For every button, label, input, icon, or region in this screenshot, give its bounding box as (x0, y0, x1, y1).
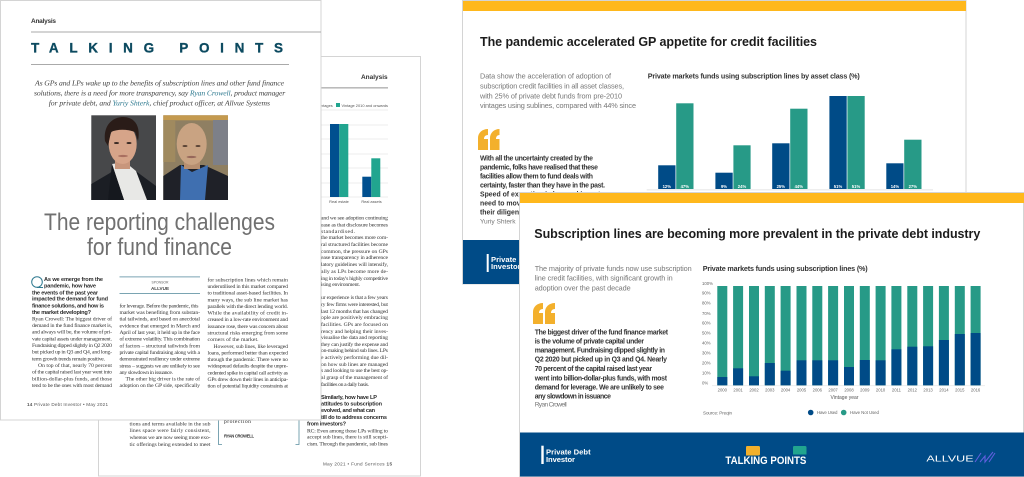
bar chart: vintage comparison: Real assets (361, 199, 382, 204)
text block: lower left column: tions and terms available in the sub (130, 421, 211, 427)
bar chart: subscription lines by asset class: 51% (852, 184, 860, 189)
text block: column one: tend to be the ones with most demand (32, 383, 112, 389)
text block: right column: ease as that disclosure becomes (321, 222, 389, 228)
footer band (520, 432, 1024, 476)
callout: sponsor box: SPONSOR (152, 280, 169, 284)
text block: standfirst (34, 78, 286, 108)
bar chart: vintage comparison: Real estate (329, 199, 349, 204)
text block: right column: ing in today's highly competitive (321, 276, 388, 282)
text block: column three: While the availability of credit in- (208, 310, 288, 317)
x axis labels: 2015 (955, 387, 965, 392)
text block: intro: Data show the acceleration of adoption of (480, 72, 612, 80)
text block: right column: ople are positively embracing (321, 315, 388, 321)
x axis labels: 2012 (908, 387, 918, 392)
text block: column three: parallels with the direct lending world. (208, 304, 289, 310)
text block: right column: last 12 months that has changed (321, 309, 388, 315)
x axis labels: 2009 (860, 387, 870, 392)
text block: pull quote: their diligence (480, 210, 527, 216)
text block: column one: finance solutions, and how is (32, 303, 104, 309)
text block: pull quote: certainty, faster than they have in the past. (480, 182, 605, 190)
text block: column two: adoption on the GP side, specifically (120, 382, 200, 389)
text block: column two: tial tailwinds, and based on anecdotal (120, 317, 200, 323)
x axis labels: 2001 (733, 387, 743, 392)
bar chart: subscription lines by asset class: 51% (834, 184, 842, 189)
bar chart: subscription lines by asset class: 27% (909, 184, 917, 189)
text block: right column: the market becomes more com- (321, 235, 388, 241)
text block: pull quote: is the volume of private capital under (535, 338, 644, 346)
text block: pull quote: need to move quickly and complete (480, 200, 597, 208)
callout: sponsor box (120, 276, 200, 294)
text block: column three: many ways, the sub line market has (208, 297, 289, 303)
text block: column one: and always will be, the volume of pri- (32, 329, 112, 336)
bar chart: subscription lines by asset class: 25% (777, 184, 785, 189)
text block: right column: rency and helping their inves- (321, 329, 388, 335)
text block: pull quote (534, 330, 669, 408)
text block: standfirst: solutions, there is a need for more transparency, say Ryan Crowell, product manager (34, 88, 286, 98)
text block: pull quote: Speed of execution is key and investors (480, 192, 611, 198)
y axis labels: 0% (702, 381, 708, 386)
text block: column three: structural risks emerging from some (208, 330, 288, 336)
x axis labels: 2000 (718, 387, 728, 392)
logo: Private Debt Investor: Private Debt (546, 448, 591, 456)
legend: Have Not Used (850, 410, 880, 415)
x axis labels: 2005 (797, 387, 807, 392)
text block: column one: but picked up in Q3 and Q4, and long- (32, 350, 112, 356)
bar chart: vintage comparison: ntages (321, 103, 333, 108)
text block: column three (208, 276, 289, 390)
text block: column one (32, 277, 113, 389)
text block: column three: corners of the market. (208, 336, 259, 343)
bar chart: subscription lines by asset class: 14% (891, 184, 899, 189)
x axis labels (718, 387, 981, 392)
x axis labels: 2007 (828, 387, 838, 392)
teal bars: have not used (717, 286, 981, 385)
x axis labels: 2008 (844, 387, 854, 392)
text block: right column: attitudes to subscription (321, 402, 383, 408)
title: article headline: The reporting challenges (44, 209, 275, 236)
text block: column two: private capital fundraising along with a (120, 349, 200, 356)
photo: Yuriy Shterk (163, 115, 228, 200)
logo: Talking Points (725, 446, 806, 467)
bar chart: subscription lines by asset class: 24% (738, 184, 746, 189)
text block: intro: subscription credit facilities in all asset classes, (480, 82, 624, 90)
footer: page 14: 14 Private Debt Investor • May 2021 (27, 402, 108, 407)
x axis labels: 2002 (749, 387, 759, 392)
title: Talking Points: TALKING POINTS (31, 41, 283, 56)
text block: column one: demand in the fund finance market is, (32, 322, 113, 329)
bar chart: vintage comparison (321, 103, 388, 204)
text block: column three: cedented spike in capital call activity as (208, 370, 289, 376)
text block: column three: to traditional asset-based facilities. In (208, 290, 288, 297)
text block: column one: pandemic, how have (44, 283, 96, 289)
panel: magazine back page (98, 56, 420, 476)
text block: pull quote: pandemic, folks have realised that these (480, 164, 598, 172)
text block: pull quote: Ryan Crowell (535, 402, 567, 408)
text block: intro: line credit facilities, with significant growth in (535, 274, 673, 282)
logo: Private Debt Investor (541, 446, 591, 464)
bar chart: subscription lines by asset class: 47% (681, 184, 689, 189)
text block: intro: adoption over the past decade (535, 284, 631, 292)
text block: right column: e actively performing due dil- (321, 354, 388, 361)
text block: column three: GPs drew down their lines in anticipa- (208, 377, 288, 383)
text block: column three: creased in a low-rate environment and (208, 317, 288, 323)
text block: lower left column (130, 421, 211, 448)
text block: right column: latory guidelines will intensify, (321, 261, 389, 268)
source note: Source: Preqin (703, 410, 732, 415)
text block: column three: widespread defaults despite the unpre- (208, 363, 288, 370)
text block: column one: On top of that, nearly 70 percent (38, 362, 112, 369)
text block: right column (307, 216, 389, 448)
text block: right column: facilities. GPs are focused on (321, 321, 388, 328)
text block: pull quote: went into billion-dollar-plus funds, with most (534, 376, 668, 382)
text block: pull quote: Yuriy Shterk (480, 218, 516, 226)
text block: column one: the market developing? (32, 310, 92, 316)
text block: right column: ease transparency in adherence (321, 255, 388, 261)
text block: right column: accept sub lines, there is still scepti- (307, 435, 388, 441)
text block: right column: on how sub lines are managed (321, 362, 388, 368)
y axis labels: 20% (702, 361, 711, 366)
x axis labels: 2014 (939, 387, 949, 392)
text block: right column: till do to address concerns (321, 415, 387, 421)
title: article headline: for fund finance (87, 234, 232, 261)
text block: right column: they can justify the expense and (321, 341, 388, 348)
text block: right column: Similarly, how have LP (321, 395, 377, 401)
bar chart: vintage comparison: Vintage 2010 and onwards (342, 103, 388, 108)
y axis labels: 40% (702, 341, 711, 346)
text block: pull quote: management. Fundraising dipped slightly in (535, 348, 665, 354)
text block: column two: of factors – structural tailwinds from (120, 342, 201, 349)
heading: section label: Analysis (31, 18, 56, 25)
text block: column one: Fundraising dipped slightly in Q2 2020 (32, 343, 112, 349)
y axis labels: 90% (702, 291, 711, 296)
logo: Talking Points: TALKING POINTS (725, 455, 806, 467)
x axis labels: 2006 (813, 387, 823, 392)
legend (808, 410, 880, 415)
text block: right column: from investors? (307, 422, 347, 428)
text block: column one: As we emerge from the (44, 277, 103, 283)
text block: pull quote: facilities allow them to fund deals with (480, 174, 593, 180)
x axis labels: 2010 (876, 387, 886, 392)
x axis labels: 2011 (892, 387, 902, 392)
x axis labels: 2003 (765, 387, 775, 392)
text block: column three: through the pandemic. There were no (208, 357, 288, 363)
text block: right column: and we see adoption continuing (321, 216, 388, 222)
text block: standfirst: As GPs and LPs wake up to the benefits of subscription lines and other fund finance (34, 78, 285, 88)
text block: pull quote: Q2 2020 but picked up in Q3 and Q4. Nearly (535, 356, 667, 364)
text block: right column: ur experience is that a few years (321, 294, 389, 301)
panel: magazine front page (0, 0, 321, 420)
text block: right column: evolved, and what can (321, 408, 376, 414)
x axis labels: 2004 (781, 387, 791, 392)
callout: pull quote attribution (218, 419, 299, 444)
text block: right column: standardised. (321, 229, 356, 235)
text block: pull quote: demand for leverage. We are unlikely to see (535, 384, 664, 392)
text block: standfirst: for private debt, and Yuriy Shterk, chief product officer, at Allvue Systems (49, 98, 270, 108)
title: Subscription lines are becoming more prevalent in the private debt industry (534, 227, 980, 241)
x axis labels: 2013 (923, 387, 933, 392)
text block: right column: common, the pressure on GPs (321, 249, 389, 255)
text block: column three: tion of potential liquidity constraints at (208, 383, 288, 390)
text block: column one: term growth trends remain positive. (32, 356, 106, 362)
footer band (463, 240, 966, 284)
logo: Allvue: ALLVUE (926, 454, 974, 464)
footer band: Private Debt (491, 255, 536, 264)
text block: right column: ral structured facilities become (321, 241, 388, 248)
text block: lower left column: tic offerings being extended to meet (130, 441, 211, 448)
text block: pull quote: 70 percent of the capital raised last year (535, 366, 652, 373)
chart title: Private markets funds using subscription lines by asset class (%) (648, 72, 860, 80)
text block: intro: The majority of private funds now use subscription (535, 264, 692, 273)
text block: column three: for subscription lines which remain (208, 276, 288, 283)
icon: Q drop cap (32, 277, 43, 288)
text block: right column: s and looking to use the best op- (321, 368, 388, 374)
text block: column one: of the capital raised last year went into (32, 369, 112, 376)
bar chart: subscription lines by asset class: 44% (795, 184, 803, 189)
text block: right column: al grasp of the management of (321, 374, 388, 381)
y axis labels: 60% (702, 321, 711, 326)
text block: column two: any slowdown in issuance. (120, 370, 174, 376)
bar chart: subscription lines by asset class: 12% (663, 184, 671, 189)
y axis labels: 10% (702, 371, 711, 376)
y axis labels (702, 281, 713, 386)
bar chart: subscription lines by asset class (647, 96, 933, 191)
title: article headline (44, 209, 275, 261)
text block: column one: the events of the past year (32, 290, 99, 296)
footer: page 15: May 2021 • Fund Services 15 (323, 461, 392, 466)
text block: right column: on-making behind sub lines. LPs (321, 348, 389, 354)
text block: pull quote: The biggest driver of the fund finance market (535, 330, 669, 336)
text block: column one: impacted the demand for fund (32, 297, 109, 303)
logo: Private Debt Investor: Investor (546, 455, 575, 464)
y axis labels: 100% (702, 281, 713, 286)
chart title: Private markets funds using subscription lines (%) (703, 264, 868, 273)
stacked bar chart: subscription lines by vintage (702, 281, 985, 401)
text block: column two: of extreme volatility. This combination (120, 336, 200, 343)
callout: pull quote attribution: RYAN CROWELL (224, 434, 254, 438)
text block: column three: loans, performed better than expected (208, 349, 288, 356)
panel: slide, subscription lines prevalent (520, 192, 1024, 476)
text block: right column: facilities on a daily basis. (321, 381, 370, 388)
text block: right column: ising environment. (321, 282, 361, 288)
callout: sponsor box: ALLVUE (151, 286, 169, 291)
y axis labels: 70% (702, 311, 711, 316)
icon: quote mark (533, 303, 555, 324)
text block: column two: The other big driver is the rate of (126, 375, 200, 382)
logo: Allvue (926, 452, 995, 464)
callout: pull quote attribution: protection (224, 419, 251, 425)
text block: column two: April of last year, it held up in the face (120, 329, 200, 336)
text block: column three: However, sub lines, like leveraged (214, 344, 288, 350)
legend: Have Used (817, 410, 838, 415)
y axis labels: 30% (702, 351, 711, 356)
panel: slide, pandemic accelerated GP appetite (462, 0, 966, 284)
text block: right column: RC: Even among those LPs willing to (307, 428, 388, 434)
text block: right column: cism. Through the pandemic, sub lines (307, 442, 389, 448)
text block: column three: underutilised in this market compared (208, 284, 288, 290)
icon: quote mark (478, 129, 500, 150)
text block: intro: vintages using sublines, compared with 44% since (480, 101, 636, 110)
y axis labels: 80% (702, 301, 711, 306)
y axis labels: 50% (702, 331, 711, 336)
text block: pull quote: any slowdown in issuance (535, 394, 611, 400)
text block: lower left column: whereas we are now seeing more exo- (130, 435, 211, 441)
text block: intro (479, 72, 636, 110)
footer band: Investor (491, 262, 521, 271)
text block: intro: with 25% of private debt funds from pre-2010 (479, 92, 622, 100)
text block: pull quote (480, 156, 611, 226)
text block: column two: stress – suggests we are unlikely to see (120, 363, 200, 369)
text block: column two (120, 302, 201, 389)
bar chart: subscription lines by asset class: 9% (721, 184, 727, 189)
photo: Ryan Crowell (91, 115, 156, 200)
navy bars: have used (717, 333, 981, 385)
text block: right column: visualise the data and reporting (321, 335, 388, 341)
text block: right column: ry few firms were interested, but (321, 301, 388, 308)
text block: lower left column: lines space were fairly consistent, (130, 427, 211, 434)
text block: column two: for leverage. Before the pandemic, this (120, 302, 199, 309)
text block: column one: vate capital assets under management. (32, 336, 113, 342)
text block: column two: demonstrated resiliency under extreme (120, 357, 200, 363)
text block: pull quote: With all the uncertainty created by the (480, 156, 593, 162)
text block: column two: evidence that emerged in March and (120, 323, 200, 329)
text block: column three: issuance rose, there was concern about (208, 324, 288, 330)
title: The pandemic accelerated GP appetite for credit facilities (480, 35, 817, 49)
heading: Analysis, page 15: Analysis (361, 74, 388, 81)
text block: intro (535, 264, 692, 292)
text block: right column: ally as LPs become more de- (321, 269, 388, 275)
text block: column one: billion-dollar-plus funds, and those (32, 375, 112, 382)
x axis labels: 2016 (971, 387, 981, 392)
axis title: Vintage year (831, 395, 859, 401)
text block: column one: Ryan Crowell: The biggest driver of (32, 315, 112, 322)
text block: column two: market was benefiting from substan- (120, 309, 200, 316)
